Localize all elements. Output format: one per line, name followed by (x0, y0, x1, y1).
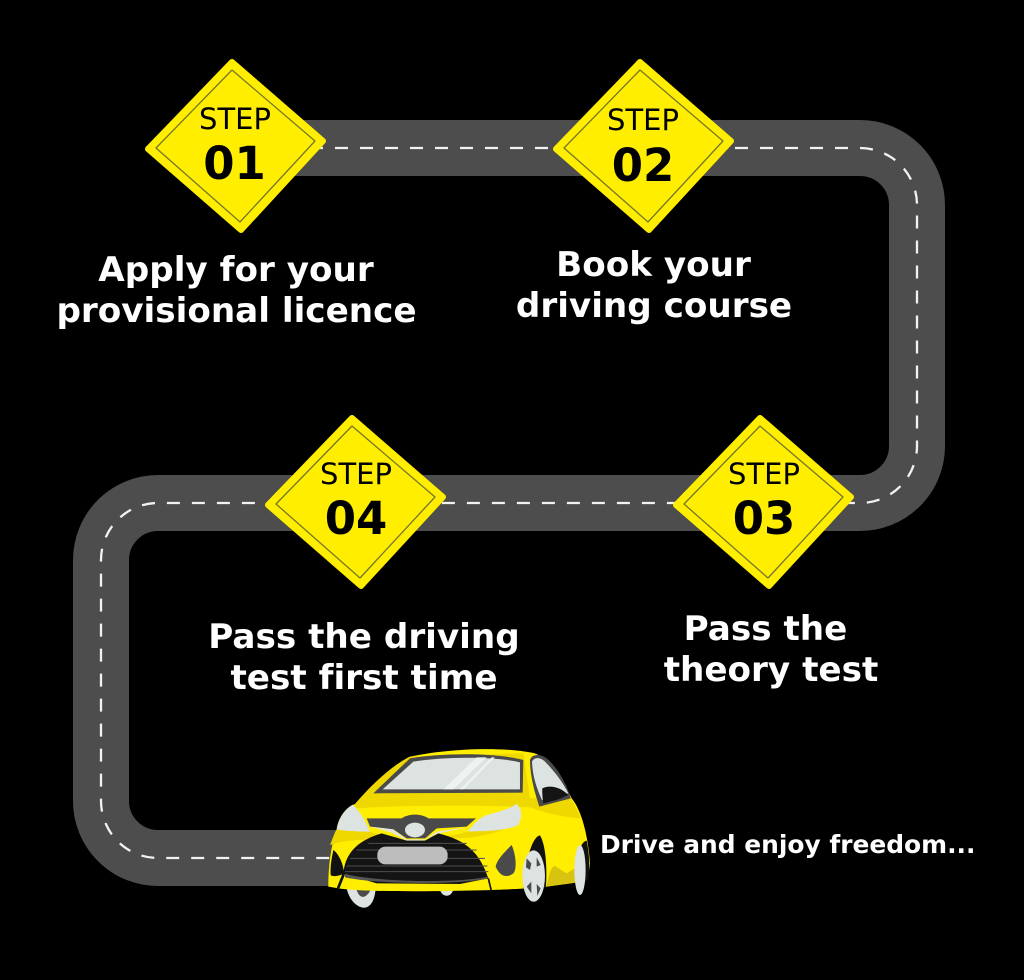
label: step 03: theory test (664, 650, 878, 690)
body (328, 749, 590, 891)
windshield (373, 754, 523, 793)
sign: step 04: STEP (320, 457, 392, 491)
sign: step 03: STEP (728, 457, 800, 491)
label: step 04: Pass the driving (208, 617, 520, 657)
sign: step 02 (556, 62, 731, 230)
label: step 03: Pass the (684, 609, 847, 649)
lower side shadow (547, 862, 589, 887)
front side wheel (522, 850, 545, 902)
label: step 04: test first time (230, 658, 498, 698)
sign: step 01: STEP (199, 102, 271, 136)
sign: step 03 (676, 418, 851, 586)
headlights (337, 805, 370, 832)
number plate (377, 847, 448, 864)
sign: step 04: 04 (325, 492, 387, 545)
sign: step 02: 02 (612, 139, 674, 192)
grille (343, 833, 488, 884)
fog lamp right (496, 845, 516, 876)
fog lamp left (331, 850, 344, 876)
label: step 01: provisional licence (56, 291, 417, 331)
sign: step 04 (268, 418, 443, 586)
road (101, 148, 917, 858)
label: step 02: driving course (516, 286, 792, 326)
label: step 02: Book your (556, 245, 751, 285)
sign: step 02: STEP (607, 103, 679, 137)
wheel arches (523, 835, 546, 889)
grille trim (367, 815, 476, 838)
shaded hood (355, 753, 581, 818)
sign: step 01: 01 (203, 137, 266, 190)
side window (530, 755, 571, 807)
front wheels under body (347, 888, 453, 908)
lower hood shadow (330, 827, 510, 845)
car illustration (328, 749, 590, 908)
sign: step 01 (148, 62, 323, 230)
label: step 01: Apply for your (98, 250, 374, 290)
rear side wheel (574, 845, 586, 895)
caption: Drive and enjoy freedom... (600, 830, 975, 859)
bumper lines (338, 873, 344, 888)
sign: step 03: 03 (733, 492, 795, 545)
